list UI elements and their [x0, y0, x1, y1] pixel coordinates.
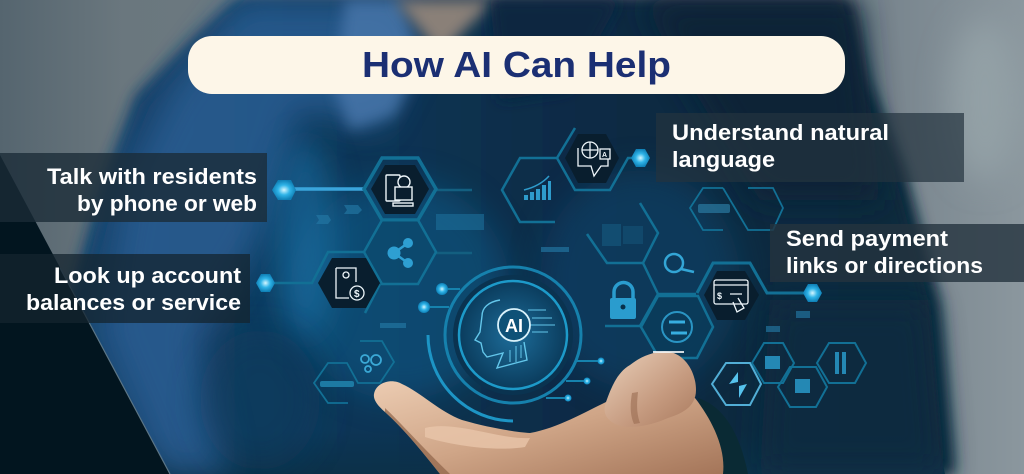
connector: balances	[272, 252, 380, 313]
hex: gears	[314, 341, 394, 403]
hex: AD panel	[587, 203, 658, 263]
connector: language	[502, 128, 640, 222]
AI core circle: AI	[505, 316, 523, 336]
sleeve cuff	[698, 398, 748, 474]
title pill: How AI Can Help	[362, 44, 671, 85]
AI core circle	[428, 267, 581, 421]
node: talk	[272, 180, 296, 200]
label band: send payment links: Send payment	[786, 226, 949, 251]
hex: search	[640, 254, 696, 326]
dark hex: payment link icon	[704, 271, 759, 320]
AI badge	[498, 309, 530, 341]
side nodes and connectors	[256, 149, 822, 402]
label band: understand natural language: language	[672, 147, 775, 172]
hex: payment frame	[697, 263, 806, 293]
hex: refresh	[605, 296, 713, 358]
title pill	[188, 36, 845, 94]
dark hex: payment link icon: $	[717, 291, 722, 301]
hex: share	[364, 220, 436, 284]
dark hex: language icon	[565, 134, 619, 183]
dark hex: phone and laptop icon	[371, 165, 429, 214]
thumb	[605, 352, 696, 427]
dark hex: account balance icon: $	[354, 289, 360, 300]
hex: chart bars	[524, 176, 551, 200]
label band: look up account	[0, 254, 250, 323]
connector: talk with residents	[288, 189, 472, 253]
head outline	[475, 300, 527, 368]
label band: look up account: Look up account	[54, 263, 242, 288]
hexes: folders bottom right	[712, 343, 866, 407]
label band: understand natural language	[656, 113, 964, 182]
lock	[610, 282, 636, 319]
node: payment	[803, 284, 822, 302]
hex: connect pair	[690, 188, 783, 230]
label band: talk with residents	[0, 153, 267, 222]
hand	[374, 352, 723, 474]
label band: understand natural language: Understand natural	[672, 120, 889, 145]
small decorative chevrons and dots	[316, 205, 810, 332]
dark hex: account balance icon	[318, 258, 380, 308]
node: balances	[256, 274, 275, 292]
dark hex: language icon: A	[602, 152, 607, 159]
hex: phone and laptop frame	[364, 158, 436, 220]
label band: talk with residents: by phone or web	[77, 191, 257, 216]
label band: send payment links	[770, 224, 1024, 282]
label band: look up account: balances or service	[26, 290, 241, 315]
laptop foreground	[0, 155, 170, 474]
label band: send payment links: links or directions	[786, 253, 983, 278]
label band: talk with residents: Talk with residents	[47, 164, 257, 189]
hexagon network	[272, 128, 866, 407]
node: language	[631, 149, 650, 167]
